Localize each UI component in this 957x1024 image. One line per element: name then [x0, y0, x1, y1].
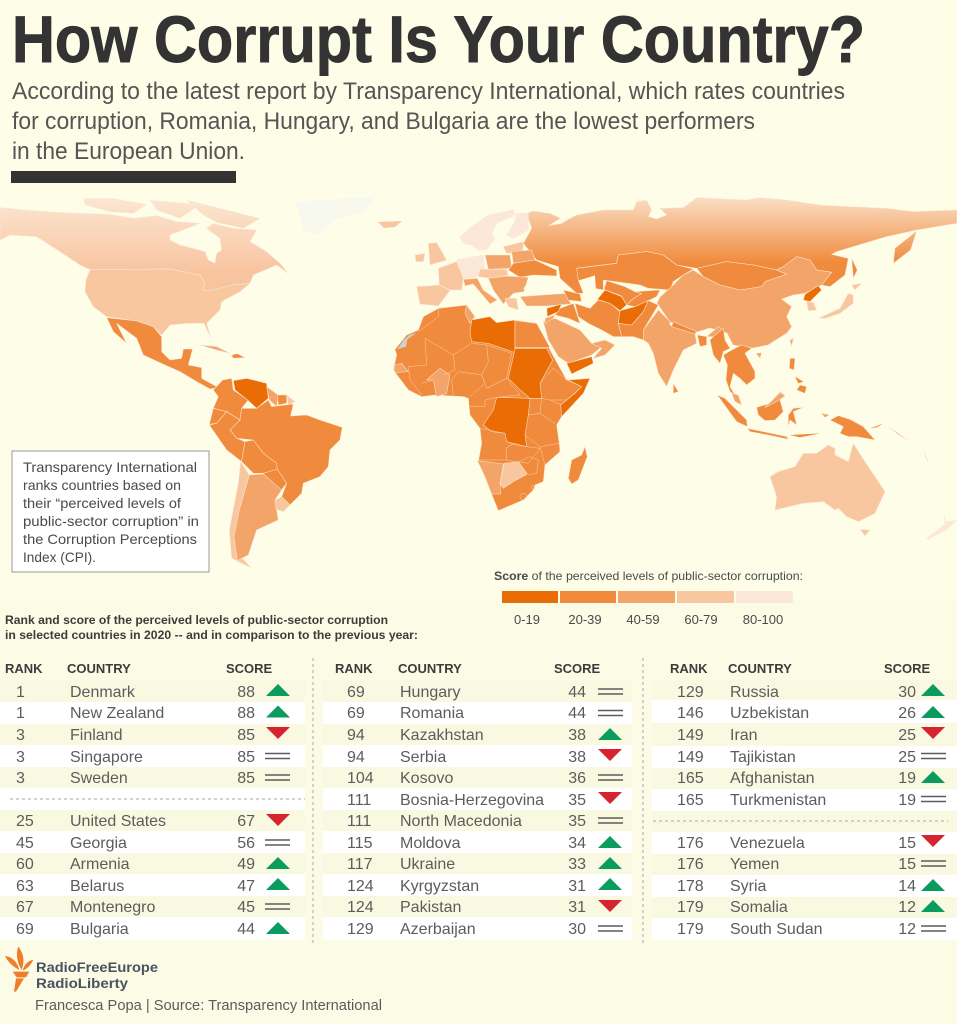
- row: Georgia: 45: [16, 835, 34, 852]
- row: Kyrgyzstan: Kyrgyzstan: [400, 878, 479, 895]
- Madagascar: [568, 447, 587, 484]
- Hokkaido: [852, 283, 862, 290]
- column dividers: [10, 658, 948, 945]
- row: Venezuela: Venezuela: [730, 835, 805, 852]
- map: North America: [0, 197, 375, 389]
- row: Denmark: 88: [237, 684, 255, 701]
- row: Moldova: 34: [568, 835, 586, 852]
- row: Sweden: 85: [237, 770, 255, 787]
- row: Bulgaria: [16, 921, 290, 938]
- row: Bulgaria: 44: [237, 921, 255, 938]
- title: How Corrupt Is Your Country?: [12, 2, 865, 76]
- map: Europe: [415, 210, 597, 310]
- Arctic islands: [83, 198, 260, 228]
- row: North Macedonia: 111: [347, 813, 371, 830]
- row: Yemen: 15: [898, 856, 916, 873]
- row: Romania: [347, 705, 623, 722]
- callout: what the index measures: Transparency International: [23, 459, 197, 475]
- row: Armenia: Armenia: [70, 856, 130, 873]
- row: Belarus: 63: [16, 878, 34, 895]
- Tasmania: [860, 529, 870, 536]
- row: North Macedonia: [347, 813, 623, 830]
- Kamchatka: [893, 231, 917, 263]
- row: Ukraine: Ukraine: [400, 856, 455, 873]
- column 3 header: SCORE: [884, 661, 931, 676]
- row: Singapore: 85: [237, 749, 255, 766]
- row: Moldova: Moldova: [400, 835, 461, 852]
- column 3 header: [670, 661, 931, 676]
- Oman and UAE: [592, 340, 615, 358]
- logo wordmark: RadioLiberty: [36, 976, 129, 991]
- Germany: [457, 255, 485, 278]
- table column 3: [670, 661, 946, 938]
- Lesotho: [520, 493, 527, 500]
- Argentina: [234, 474, 282, 561]
- table heading: Rank and score of the perceived levels of public-sector corruption: [5, 613, 388, 627]
- subtitle: in the European Union.: [12, 138, 245, 165]
- row: Singapore: 3: [16, 749, 25, 766]
- legend labels: 20-39: [568, 612, 602, 627]
- callout: what the index measures: Index (CPI).: [23, 549, 96, 565]
- column 1 header: RANK: [5, 661, 43, 676]
- table column 1: [5, 661, 290, 938]
- row: Sweden: Sweden: [70, 770, 128, 787]
- New Zealand: [927, 513, 957, 540]
- row: United States: [16, 813, 290, 830]
- row: Afghanistan: 19: [898, 770, 916, 787]
- row: Turkmenistan: Turkmenistan: [730, 792, 826, 809]
- row: Georgia: 56: [237, 835, 255, 852]
- Hispaniola: [232, 354, 245, 358]
- Somalia: [561, 378, 590, 417]
- row: Tajikistan: 149: [677, 749, 704, 766]
- row: Hungary: 69: [347, 684, 365, 701]
- Bolivia: [242, 440, 277, 473]
- United States: [85, 269, 250, 338]
- South Korea: [807, 302, 817, 311]
- French Guiana: [287, 395, 295, 405]
- row: Romania: Romania: [400, 705, 464, 722]
- callout: what the index measures: ranks countries based on: [23, 477, 181, 493]
- row: Somalia: 179: [677, 899, 704, 916]
- row: Russia: 30: [898, 684, 916, 701]
- Sudan and South Sudan: [508, 348, 553, 398]
- Sumatra: [717, 395, 747, 427]
- Greece: [505, 298, 518, 310]
- row: Armenia: 49: [237, 856, 255, 873]
- callout: what the index measures: the Corruption Perceptions: [23, 531, 197, 547]
- column 2 header: RANK: [335, 661, 373, 676]
- Mexico and Central America: [107, 318, 218, 389]
- title underline bar: [11, 171, 236, 183]
- logo wordmark: [36, 960, 159, 991]
- legend: [494, 569, 803, 627]
- legend labels: 0-19: [514, 612, 540, 627]
- Black Sea: [523, 277, 563, 294]
- column 2 header: [335, 661, 601, 676]
- row: Kosovo: Kosovo: [400, 770, 453, 787]
- Baltic states: [503, 242, 523, 253]
- Caucasus: [563, 290, 582, 302]
- Saudi Arabia: [543, 318, 602, 363]
- Borneo: [757, 392, 785, 421]
- Ukraine: [508, 260, 557, 277]
- legend labels: 60-79: [684, 612, 718, 627]
- Finland: [507, 213, 528, 238]
- callout: what the index measures: their “perceived levels of: [23, 495, 181, 511]
- Turkmenistan: [597, 290, 627, 311]
- row: Finland: [16, 727, 290, 744]
- row: Denmark: 1: [16, 684, 25, 701]
- Cuba: [200, 345, 230, 353]
- row: Kazakhstan: [347, 727, 622, 744]
- Iraq: [555, 303, 580, 323]
- column 1 header: SCORE: [226, 661, 273, 676]
- row: Armenia: [16, 856, 290, 873]
- row: United States: 67: [237, 813, 255, 830]
- row: Finland: 85: [237, 727, 255, 744]
- North Korea: [803, 286, 822, 302]
- Taiwan: [790, 338, 793, 347]
- row: United States: 25: [16, 813, 34, 830]
- row: Kyrgyzstan: 31: [568, 878, 586, 895]
- row: Belarus: 47: [237, 878, 255, 895]
- map: Africa: [393, 305, 590, 511]
- row: Venezuela: [677, 835, 945, 852]
- row: Bosnia-Herzegovina: [347, 792, 622, 809]
- subtitle: for corruption, Romania, Hungary, and Bulgaria are the lowest performers: [12, 108, 755, 135]
- row: Hungary: [347, 684, 623, 701]
- Greenland: [295, 197, 375, 235]
- row: Pakistan: 124: [347, 899, 374, 916]
- row: Azerbaijan: 30: [568, 921, 586, 938]
- row: Russia: Russia: [730, 684, 779, 701]
- row: Russia: 129: [677, 684, 704, 701]
- United Kingdom: [428, 243, 447, 265]
- Uzbekistan: [604, 281, 642, 305]
- row: Azerbaijan: [347, 921, 623, 938]
- row: Serbia: 38: [568, 749, 586, 766]
- logo wordmark: RadioFreeEurope: [36, 960, 159, 975]
- row: Sweden: [16, 770, 290, 787]
- Suriname: [277, 395, 287, 405]
- callout: what the index measures: [12, 451, 209, 572]
- Uruguay: [275, 497, 290, 512]
- row: Pakistan: [347, 899, 622, 916]
- Australia: [770, 443, 885, 522]
- Lesser Sundas: [790, 433, 820, 437]
- row: Kazakhstan: 94: [347, 727, 365, 744]
- row: Georgia: Georgia: [70, 835, 127, 852]
- Turkey: [520, 293, 571, 306]
- Canada and Alaska: [0, 208, 288, 291]
- Brazil: [230, 400, 342, 505]
- Chile: [229, 462, 252, 568]
- row: Denmark: Denmark: [70, 684, 136, 701]
- Colombia: [213, 378, 248, 420]
- row: Sweden: 3: [16, 770, 25, 787]
- Namibia: [477, 461, 503, 494]
- Russia: [523, 198, 957, 293]
- map: southern and western Asia: [543, 281, 730, 393]
- row: Kosovo: 104: [347, 770, 374, 787]
- row: North Macedonia: 35: [568, 813, 586, 830]
- row: New Zealand: 1: [16, 705, 25, 722]
- row: Bulgaria: Bulgaria: [70, 921, 129, 938]
- Poland: [485, 255, 512, 269]
- Japan: [818, 293, 853, 318]
- Syria: [547, 304, 562, 317]
- row: Azerbaijan: 129: [347, 921, 374, 938]
- Nepal: [672, 322, 697, 334]
- row: Ukraine: 117: [347, 856, 373, 873]
- row: Kazakhstan: Kazakhstan: [400, 727, 484, 744]
- row: Pakistan: 31: [568, 899, 586, 916]
- legend labels: [514, 612, 783, 627]
- row: Uzbekistan: Uzbekistan: [730, 705, 809, 722]
- Africa base: [393, 305, 590, 511]
- Indochina: [723, 345, 755, 395]
- Afghanistan: [618, 301, 648, 325]
- Northeast India: [707, 327, 723, 337]
- column 3 header: COUNTRY: [728, 661, 792, 676]
- Levant: [545, 315, 555, 323]
- row: New Zealand: New Zealand: [70, 705, 164, 722]
- Venezuela: [233, 378, 268, 408]
- row: Singapore: [16, 749, 290, 766]
- Italy: [463, 278, 497, 304]
- row: Georgia: [16, 835, 290, 852]
- row: Finland: Finland: [70, 727, 122, 744]
- row: Bosnia-Herzegovina: Bosnia-Herzegovina: [400, 792, 544, 809]
- Peru: [209, 412, 245, 462]
- row: Hungary: Hungary: [400, 684, 460, 701]
- row: Kazakhstan: 38: [568, 727, 586, 744]
- row: Pakistan: Pakistan: [400, 899, 461, 916]
- row: Afghanistan: Afghanistan: [730, 770, 815, 787]
- Pakistan: [618, 301, 658, 340]
- Luzon: [789, 358, 795, 370]
- Iberia: [417, 285, 450, 306]
- Balkans: [488, 276, 528, 304]
- Sakhalin: [852, 258, 857, 278]
- subtitle: According to the latest report by Transparency International, which rates countries: [12, 78, 845, 105]
- Paraguay: [263, 469, 287, 490]
- legend swatches: [502, 591, 793, 603]
- column 3 header: RANK: [670, 661, 708, 676]
- row: Moldova: [347, 835, 622, 852]
- table column 2: [335, 661, 623, 938]
- row: Kyrgyzstan: 124: [347, 878, 374, 895]
- Myanmar: [710, 328, 730, 363]
- Eswatini: [531, 485, 535, 489]
- map: South America: [209, 378, 342, 568]
- India: [643, 310, 697, 387]
- row: Syria: 14: [898, 878, 916, 895]
- Libya: [470, 317, 515, 353]
- Tunisia: [465, 305, 475, 323]
- row: Azerbaijan: Azerbaijan: [400, 921, 476, 938]
- Norway and Sweden: [460, 210, 515, 250]
- legend labels: 40-59: [626, 612, 660, 627]
- Senegal: [394, 363, 408, 373]
- row: Bosnia-Herzegovina: 111: [347, 792, 371, 809]
- Ecuador: [209, 408, 227, 424]
- Yemen: [567, 357, 593, 374]
- row: Yemen: 176: [677, 856, 704, 873]
- China: [657, 257, 832, 348]
- row: South Sudan: [677, 921, 946, 938]
- row: North Macedonia: North Macedonia: [400, 813, 522, 830]
- row: Venezuela: 176: [677, 835, 704, 852]
- row: Bosnia-Herzegovina: 35: [568, 792, 586, 809]
- column 1 header: [5, 661, 273, 676]
- row: Finland: 3: [16, 727, 25, 744]
- row: Tajikistan: [677, 749, 946, 766]
- row: Montenegro: 45: [237, 899, 255, 916]
- Caspian Sea: [578, 275, 597, 306]
- France: [438, 262, 463, 290]
- row: Armenia: 60: [16, 856, 34, 873]
- row: Ukraine: [347, 856, 622, 873]
- Western Sahara stripe: [397, 333, 417, 349]
- New Guinea: [830, 416, 875, 440]
- Sri Lanka: [673, 383, 678, 393]
- row: Iran: [677, 727, 945, 744]
- row: Uzbekistan: 26: [898, 705, 916, 722]
- row: Syria: 178: [677, 878, 704, 895]
- row: Turkmenistan: 165: [677, 792, 704, 809]
- world map: [0, 197, 957, 568]
- row: Belarus: [16, 878, 290, 895]
- Kazakhstan: [577, 252, 693, 290]
- Ireland: [415, 253, 425, 262]
- row: Somalia: 12: [898, 899, 916, 916]
- Hainan: [756, 353, 762, 358]
- callout: what the index measures: public-sector corruption” in: [23, 513, 199, 529]
- Visayas: [795, 377, 803, 383]
- row: Iran: 25: [898, 727, 916, 744]
- row: Kosovo: 36: [568, 770, 586, 787]
- row: Syria: [677, 878, 945, 895]
- row: Afghanistan: [677, 770, 945, 787]
- Sulawesi: [788, 407, 803, 427]
- row: Singapore: Singapore: [70, 749, 143, 766]
- Bangladesh: [697, 335, 707, 347]
- African borders: [408, 308, 582, 475]
- Melanesia islands: [822, 413, 930, 467]
- row: Serbia: Serbia: [400, 749, 446, 766]
- row: Belarus: Belarus: [70, 878, 124, 895]
- row: Turkmenistan: [677, 792, 946, 809]
- row: United States: United States: [70, 813, 166, 830]
- map: Southeast Asia and Oceania: [717, 338, 957, 540]
- row: Serbia: 94: [347, 749, 365, 766]
- row: Ukraine: 33: [568, 856, 586, 873]
- Burkina Faso and Ghana: [427, 368, 450, 397]
- row: Tajikistan: Tajikistan: [730, 749, 796, 766]
- row: Somalia: Somalia: [730, 899, 788, 916]
- row: Denmark: [16, 684, 290, 701]
- table background: [0, 680, 957, 940]
- legend title: Score of the perceived levels of public-sector corruption:: [494, 569, 803, 583]
- row: Afghanistan: 165: [677, 770, 704, 787]
- Iran: [575, 300, 622, 337]
- column 1 header: COUNTRY: [67, 661, 131, 676]
- row: Yemen: [677, 856, 946, 873]
- row: Bulgaria: 69: [16, 921, 34, 938]
- Egypt: [515, 321, 550, 347]
- row: South Sudan: 12: [898, 921, 916, 938]
- row: Venezuela: 15: [898, 835, 916, 852]
- column 2 header: SCORE: [554, 661, 601, 676]
- Malaysian Borneo: [765, 393, 785, 407]
- Kyrgyzstan and Tajikistan: [627, 290, 660, 307]
- row: South Sudan: 179: [677, 921, 704, 938]
- Guyana: [267, 387, 278, 407]
- row: Somalia: [677, 899, 945, 916]
- row: South Sudan: South Sudan: [730, 921, 823, 938]
- row: Turkmenistan: 19: [898, 792, 916, 809]
- row: Kosovo: [347, 770, 623, 787]
- legend labels: 80-100: [743, 612, 783, 627]
- row: Romania: 44: [568, 705, 586, 722]
- row: Romania: 69: [347, 705, 365, 722]
- Botswana: [500, 462, 527, 488]
- row: Moldova: 115: [347, 835, 373, 852]
- row: Montenegro: Montenegro: [70, 899, 155, 916]
- row: New Zealand: 88: [237, 705, 255, 722]
- source credit: Francesca Popa | Source: Transparency International: [35, 997, 382, 1014]
- Mongolia: [697, 262, 787, 290]
- Malay Peninsula: [732, 393, 742, 405]
- Democratic Republic of Congo: [483, 397, 530, 447]
- row: Montenegro: [16, 899, 290, 916]
- subtitle: [12, 78, 845, 165]
- row: Montenegro: 67: [16, 899, 34, 916]
- row: New Zealand: [16, 705, 290, 722]
- row: Kyrgyzstan: [347, 878, 622, 895]
- Mindanao: [797, 385, 807, 393]
- Central Europe: [478, 269, 508, 278]
- row: Yemen: Yemen: [730, 856, 779, 873]
- table heading: [5, 613, 418, 642]
- map: northern Asia: [523, 198, 957, 348]
- row: Iran: Iran: [730, 727, 758, 744]
- row: Serbia: [347, 749, 622, 766]
- row: Hungary: 44: [568, 684, 586, 701]
- row: Uzbekistan: 146: [677, 705, 704, 722]
- row: Iran: 149: [677, 727, 704, 744]
- row: Uzbekistan: [677, 705, 945, 722]
- row: Russia: [677, 684, 945, 701]
- Iceland: [378, 221, 402, 228]
- icon: RFE/RL torch logo: [5, 947, 33, 992]
- Belarus: [512, 250, 535, 263]
- Java: [747, 428, 788, 439]
- table heading: in selected countries in 2020 -- and in comparison to the previous year:: [5, 628, 418, 642]
- column 2 header: COUNTRY: [398, 661, 462, 676]
- row: Tajikistan: 25: [898, 749, 916, 766]
- row: Syria: Syria: [730, 878, 767, 895]
